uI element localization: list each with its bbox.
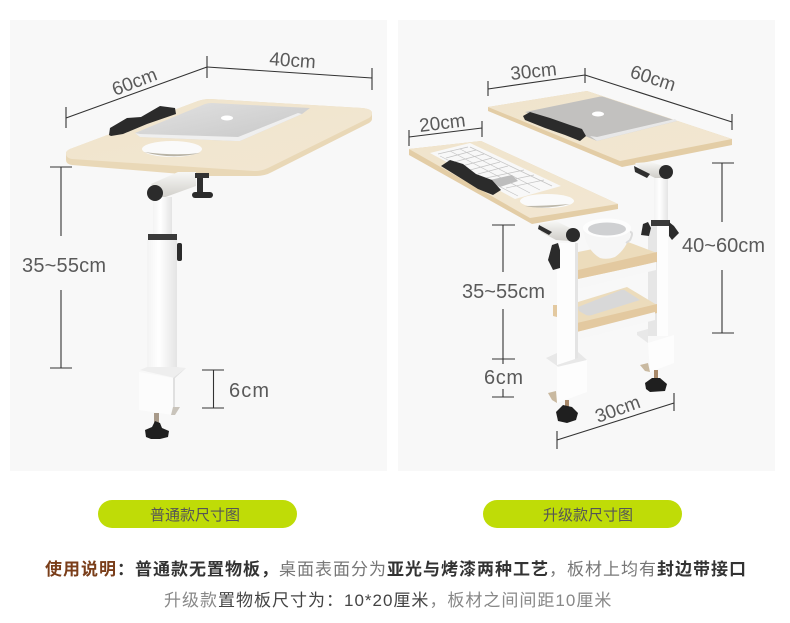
top board: [488, 91, 732, 167]
dimension: 60cm: [66, 56, 207, 128]
top holder bar: [523, 112, 586, 141]
right clamp: [637, 329, 674, 392]
upper post and knobs: [641, 220, 679, 336]
left clamp: [546, 352, 587, 423]
dimension: 30cm bottom: [557, 392, 674, 449]
dimension: 6cm upgraded: 6cm: [484, 367, 523, 389]
dimension: 30cm bottom: 30cm: [593, 392, 643, 428]
dimension: 6cm: 6cm: [229, 380, 269, 402]
dimension: 60cm top: 60cm: [627, 62, 678, 96]
label pill: upgraded model: [483, 500, 682, 528]
dimension: 35~55cm upgraded: 35~55cm: [462, 281, 545, 303]
dimension: 40~60cm: [682, 163, 765, 333]
phone: [578, 290, 640, 316]
table top: standard model: [66, 99, 372, 176]
dimension: 6cm upgraded: [484, 359, 523, 397]
keyboard holder bar: [441, 160, 501, 195]
dimension: 40cm: [207, 49, 372, 90]
dimension: 30cm top: [488, 59, 585, 96]
laptop: upgraded: [525, 96, 677, 141]
dimension: 20cm: 20cm: [418, 110, 467, 137]
left post and knob: [548, 243, 578, 365]
usage note: line 2: 升级款置物板尺寸为：10*20厘米，板材之间间距10厘米: [164, 591, 612, 610]
dimension: 35~55cm upgraded: [462, 225, 545, 359]
column: [147, 234, 182, 372]
adjustable arm and lower knob: [147, 172, 213, 237]
panel: standard model size diagram: [10, 20, 387, 471]
usage note: line 1: 使用说明：普通款无置物板，桌面表面分为亚光与烤漆两种工艺，板材上均有封边带接口: [45, 559, 747, 579]
top arm: [634, 162, 673, 222]
holder bar: [109, 106, 176, 136]
laptop: [135, 103, 310, 141]
shelf: lower with phone: [553, 287, 657, 340]
dimension: 60cm top: [585, 62, 732, 130]
dimension: 40~60cm: 40~60cm: [682, 235, 765, 257]
mouse: [142, 141, 202, 157]
desk clamp: [139, 367, 186, 415]
mouse: upgraded: [520, 194, 574, 208]
dimension: 6cm: [202, 370, 269, 408]
cup: [583, 218, 632, 259]
panel: upgraded model size diagram: [398, 20, 775, 471]
label pill: standard model: [98, 500, 297, 528]
left arm: [538, 221, 580, 242]
dimension: 30cm top: 30cm: [509, 59, 558, 85]
keyboard: [430, 143, 561, 199]
label pill: upgraded model: 升级款尺寸图: [543, 504, 633, 525]
clamp screw knob: [145, 413, 169, 439]
shelf: upper with cup: [578, 226, 657, 336]
label pill: standard model: 普通款尺寸图: [150, 504, 240, 525]
dimension: 35~55cm: 35~55cm: [22, 255, 106, 277]
dimension: 20cm: [409, 110, 482, 146]
dimension: 60cm: 60cm: [109, 64, 160, 101]
dimension: 40cm: 40cm: [269, 49, 316, 73]
dimension: 35~55cm: [22, 167, 106, 368]
bottom board: [409, 141, 618, 224]
